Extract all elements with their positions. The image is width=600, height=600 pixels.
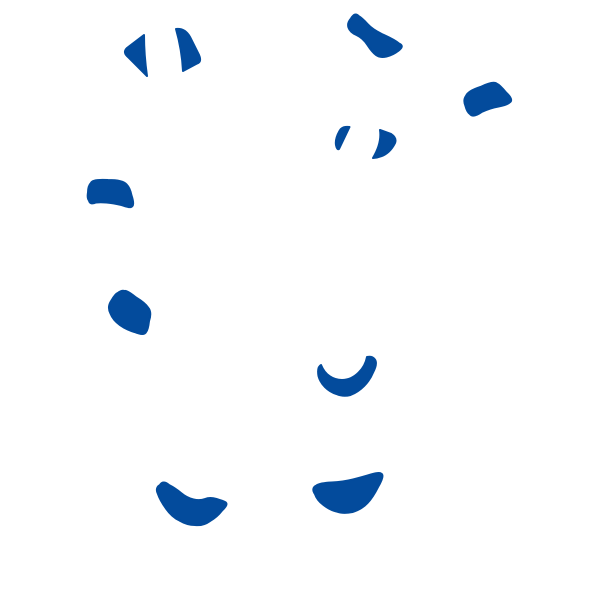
- blob: top centre: [348, 14, 402, 57]
- blob: left lower: [109, 291, 150, 334]
- blob: top right: [464, 83, 511, 116]
- blob: bottom left: [157, 482, 226, 525]
- blob: split shape top left: [125, 29, 200, 76]
- blob: crescent centre: [318, 357, 376, 396]
- blob: left upper: [88, 180, 133, 207]
- blob: bottom centre: [313, 473, 382, 513]
- blob: split shape centre right: [336, 127, 396, 158]
